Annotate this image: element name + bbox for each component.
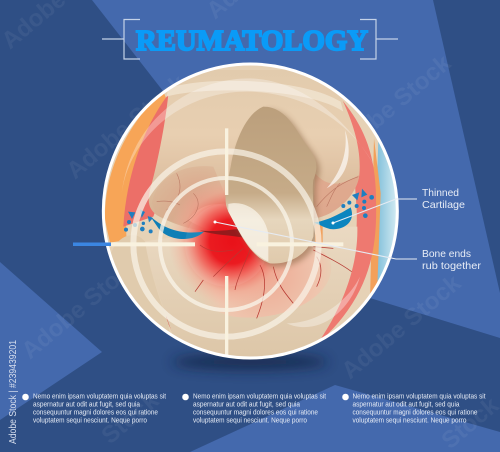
cartilage right <box>314 207 352 229</box>
title text: REUMATOLOGY <box>136 25 368 57</box>
femur right condyle blush <box>313 173 359 218</box>
text block 3 <box>342 392 486 424</box>
text block 2: consequuntur magni dolores eos qui ratione <box>193 408 318 416</box>
callout: thinned cartilage <box>332 187 465 224</box>
fat sliver by bone <box>315 223 323 247</box>
callout: thinned cartilage: Cartilage <box>422 199 465 211</box>
target crosshair <box>110 128 343 363</box>
watermarks: Adobe Stock <box>327 49 457 165</box>
joint gap <box>200 229 242 238</box>
circle shadow <box>172 354 328 370</box>
callout: bone ends <box>214 220 482 272</box>
title brackets <box>102 20 398 59</box>
muscle left <box>123 95 168 226</box>
text block 1: Nemo enim ipsam voluptatem quia voluptas sit <box>33 392 167 400</box>
text block 2: voluptatem sequi nesciunt. Neque porro <box>193 416 307 424</box>
fibula <box>112 236 169 331</box>
text block 1: aspernatur aut odit aut fugit, sed quia <box>33 400 141 408</box>
red inflammation <box>174 188 274 296</box>
muscle right <box>321 100 376 338</box>
text block 1 <box>22 392 167 424</box>
cartilage left <box>150 216 204 239</box>
text block 2 <box>182 392 327 424</box>
tibia blush <box>215 246 327 318</box>
cartilage debris <box>124 189 374 233</box>
watermarks: Stock <box>97 386 164 450</box>
callout: bone ends: Bone ends <box>422 248 471 260</box>
callout: bone ends: rub together <box>422 260 482 272</box>
lens rim <box>103 64 397 358</box>
tibia <box>145 227 357 367</box>
knee illustration <box>103 64 400 367</box>
stock id caption: Adobe Stock | #239439201 <box>8 340 19 444</box>
text block 1: voluptatem sequi nesciunt. Neque porro <box>33 416 147 424</box>
fat layer left <box>105 92 168 243</box>
title <box>102 20 398 59</box>
text block 3: aspernatur aut odit aut fugit, sed quia <box>352 400 460 408</box>
target line left <box>73 242 111 246</box>
femur top band <box>167 81 343 112</box>
blood vessels <box>195 245 352 318</box>
text block 1: consequuntur magni dolores eos qui ratione <box>33 408 158 416</box>
central bone highlight <box>228 203 268 262</box>
muscle lower left <box>166 316 172 330</box>
text block 2: aspernatur aut odit aut fugit, sed quia <box>193 400 301 408</box>
central bone shadow <box>229 110 320 267</box>
lens highlights <box>122 78 377 193</box>
target rings <box>133 151 319 337</box>
central bone <box>226 107 316 264</box>
text block 3: voluptatem sequi nesciunt. Neque porro <box>352 416 466 424</box>
watermarks: Adobe Stock <box>337 269 467 385</box>
lens disc <box>103 64 397 358</box>
right condyle sheen <box>327 130 349 188</box>
watermarks: Adobe Stock <box>17 249 147 365</box>
femur <box>149 70 360 232</box>
text block 2: Nemo enim ipsam voluptatem quia voluptas sit <box>193 392 327 400</box>
text block 3: consequuntur magni dolores eos qui ratione <box>352 408 478 416</box>
watermarks: Adobe Stock <box>62 69 192 185</box>
skin layer <box>378 142 396 282</box>
femur left condyle blush <box>164 166 222 216</box>
upper joint blush <box>189 204 216 224</box>
callout: thinned cartilage: Thinned <box>422 187 459 199</box>
fat layer right <box>370 138 381 300</box>
